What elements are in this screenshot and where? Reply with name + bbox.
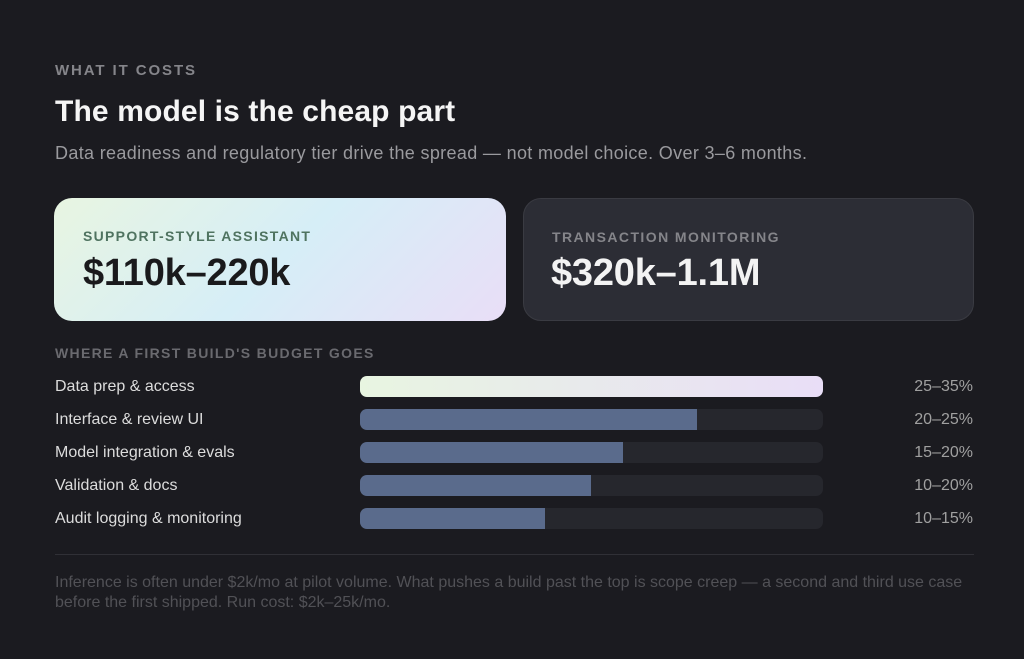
bar chart: budget breakdown (55, 376, 973, 529)
bar: interface (360, 409, 822, 430)
footnote: before the first shipped. Run cost: $2k–25k/mo. (55, 594, 390, 610)
eyebrow: what it costs: WHAT IT COSTS (55, 62, 197, 79)
row: model integration (55, 442, 973, 463)
row label: Audit logging & monitoring (55, 510, 242, 527)
row value: 10–15% (914, 510, 973, 527)
row: audit logging (55, 508, 973, 529)
row label: Data prep & access (55, 378, 195, 395)
row label: Model integration & evals (55, 444, 235, 461)
row label: Validation & docs (55, 477, 177, 494)
footnote (55, 574, 962, 610)
bar: full gradient (360, 376, 822, 396)
value: support range: $110k–220k (83, 252, 290, 294)
row value: 10–20% (914, 477, 973, 494)
value: monitoring range: $320k–1.1M (551, 252, 760, 294)
bar: audit logging (360, 508, 822, 528)
title: The model is the cheap part (55, 95, 455, 128)
panel: transaction monitoring (523, 198, 974, 321)
footnote: Inference is often under $2k/mo at pilot volume. What pushes a build past the top is scope creep — a second and third use case (55, 574, 962, 591)
row value: 20–25% (914, 411, 973, 428)
label: support-style assistant: SUPPORT-STYLE ASSISTANT (83, 228, 311, 244)
row: validation (55, 475, 973, 496)
bar: validation (360, 475, 822, 496)
row label: Interface & review UI (55, 411, 204, 428)
panel: support-style assistant (54, 198, 506, 321)
row: data prep (55, 376, 973, 397)
subtitle: Data readiness and regulatory tier drive the spread — not model choice. Over 3–6 months. (55, 143, 807, 163)
row value: 15–20% (914, 444, 973, 461)
section heading: budget: WHERE A FIRST BUILD'S BUDGET GOES (55, 345, 375, 361)
bar: model integration (360, 442, 822, 462)
label: transaction monitoring: TRANSACTION MONITORING (552, 229, 780, 245)
row value: 25–35% (914, 378, 973, 395)
row: interface (55, 409, 973, 430)
